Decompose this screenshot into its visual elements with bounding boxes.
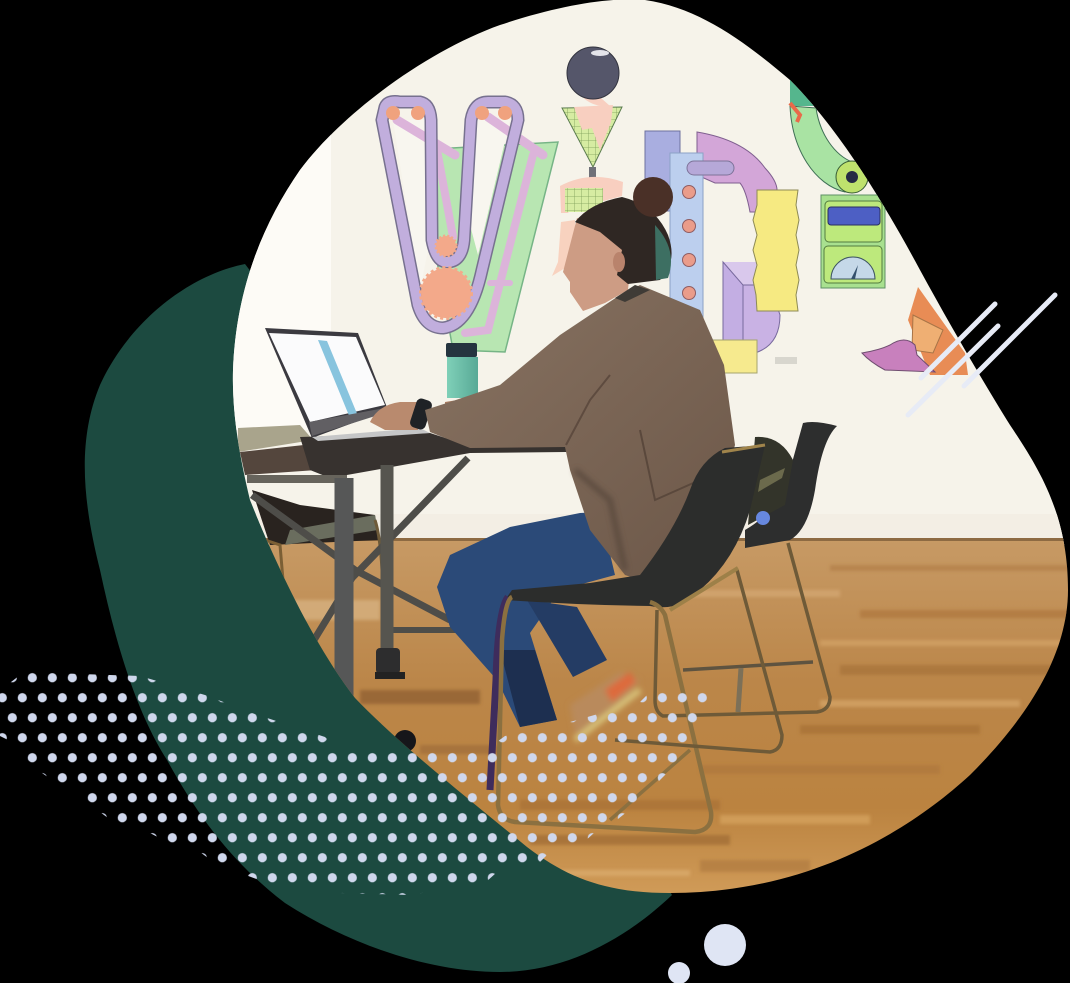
halftone dot band [0,672,712,895]
photo blob [220,0,1070,898]
back chair [655,422,837,716]
water bottle [446,343,478,398]
blurred shoes [570,672,640,740]
front chair [490,445,782,832]
hair [575,197,672,284]
white diagonal lines [908,295,1055,415]
bubbles [668,924,746,983]
hand and forearm [370,402,418,430]
table [238,425,566,752]
watch [410,398,432,430]
laptop [265,328,430,441]
wall art: green pipe and panel [790,80,885,288]
jeans [437,512,615,727]
wall art: letter D machine [645,131,799,373]
wall [220,0,1070,545]
person [370,177,735,740]
hair bun [633,177,673,217]
neck and face [563,218,632,311]
wall art: ice cream machine [552,47,623,276]
wall art: orange melt and purple puddle [862,287,968,375]
sweater [425,285,735,580]
green blob [85,264,672,972]
wooden floor [220,538,1070,898]
wall art: letter V chain machine [382,102,558,352]
ear [613,252,625,272]
